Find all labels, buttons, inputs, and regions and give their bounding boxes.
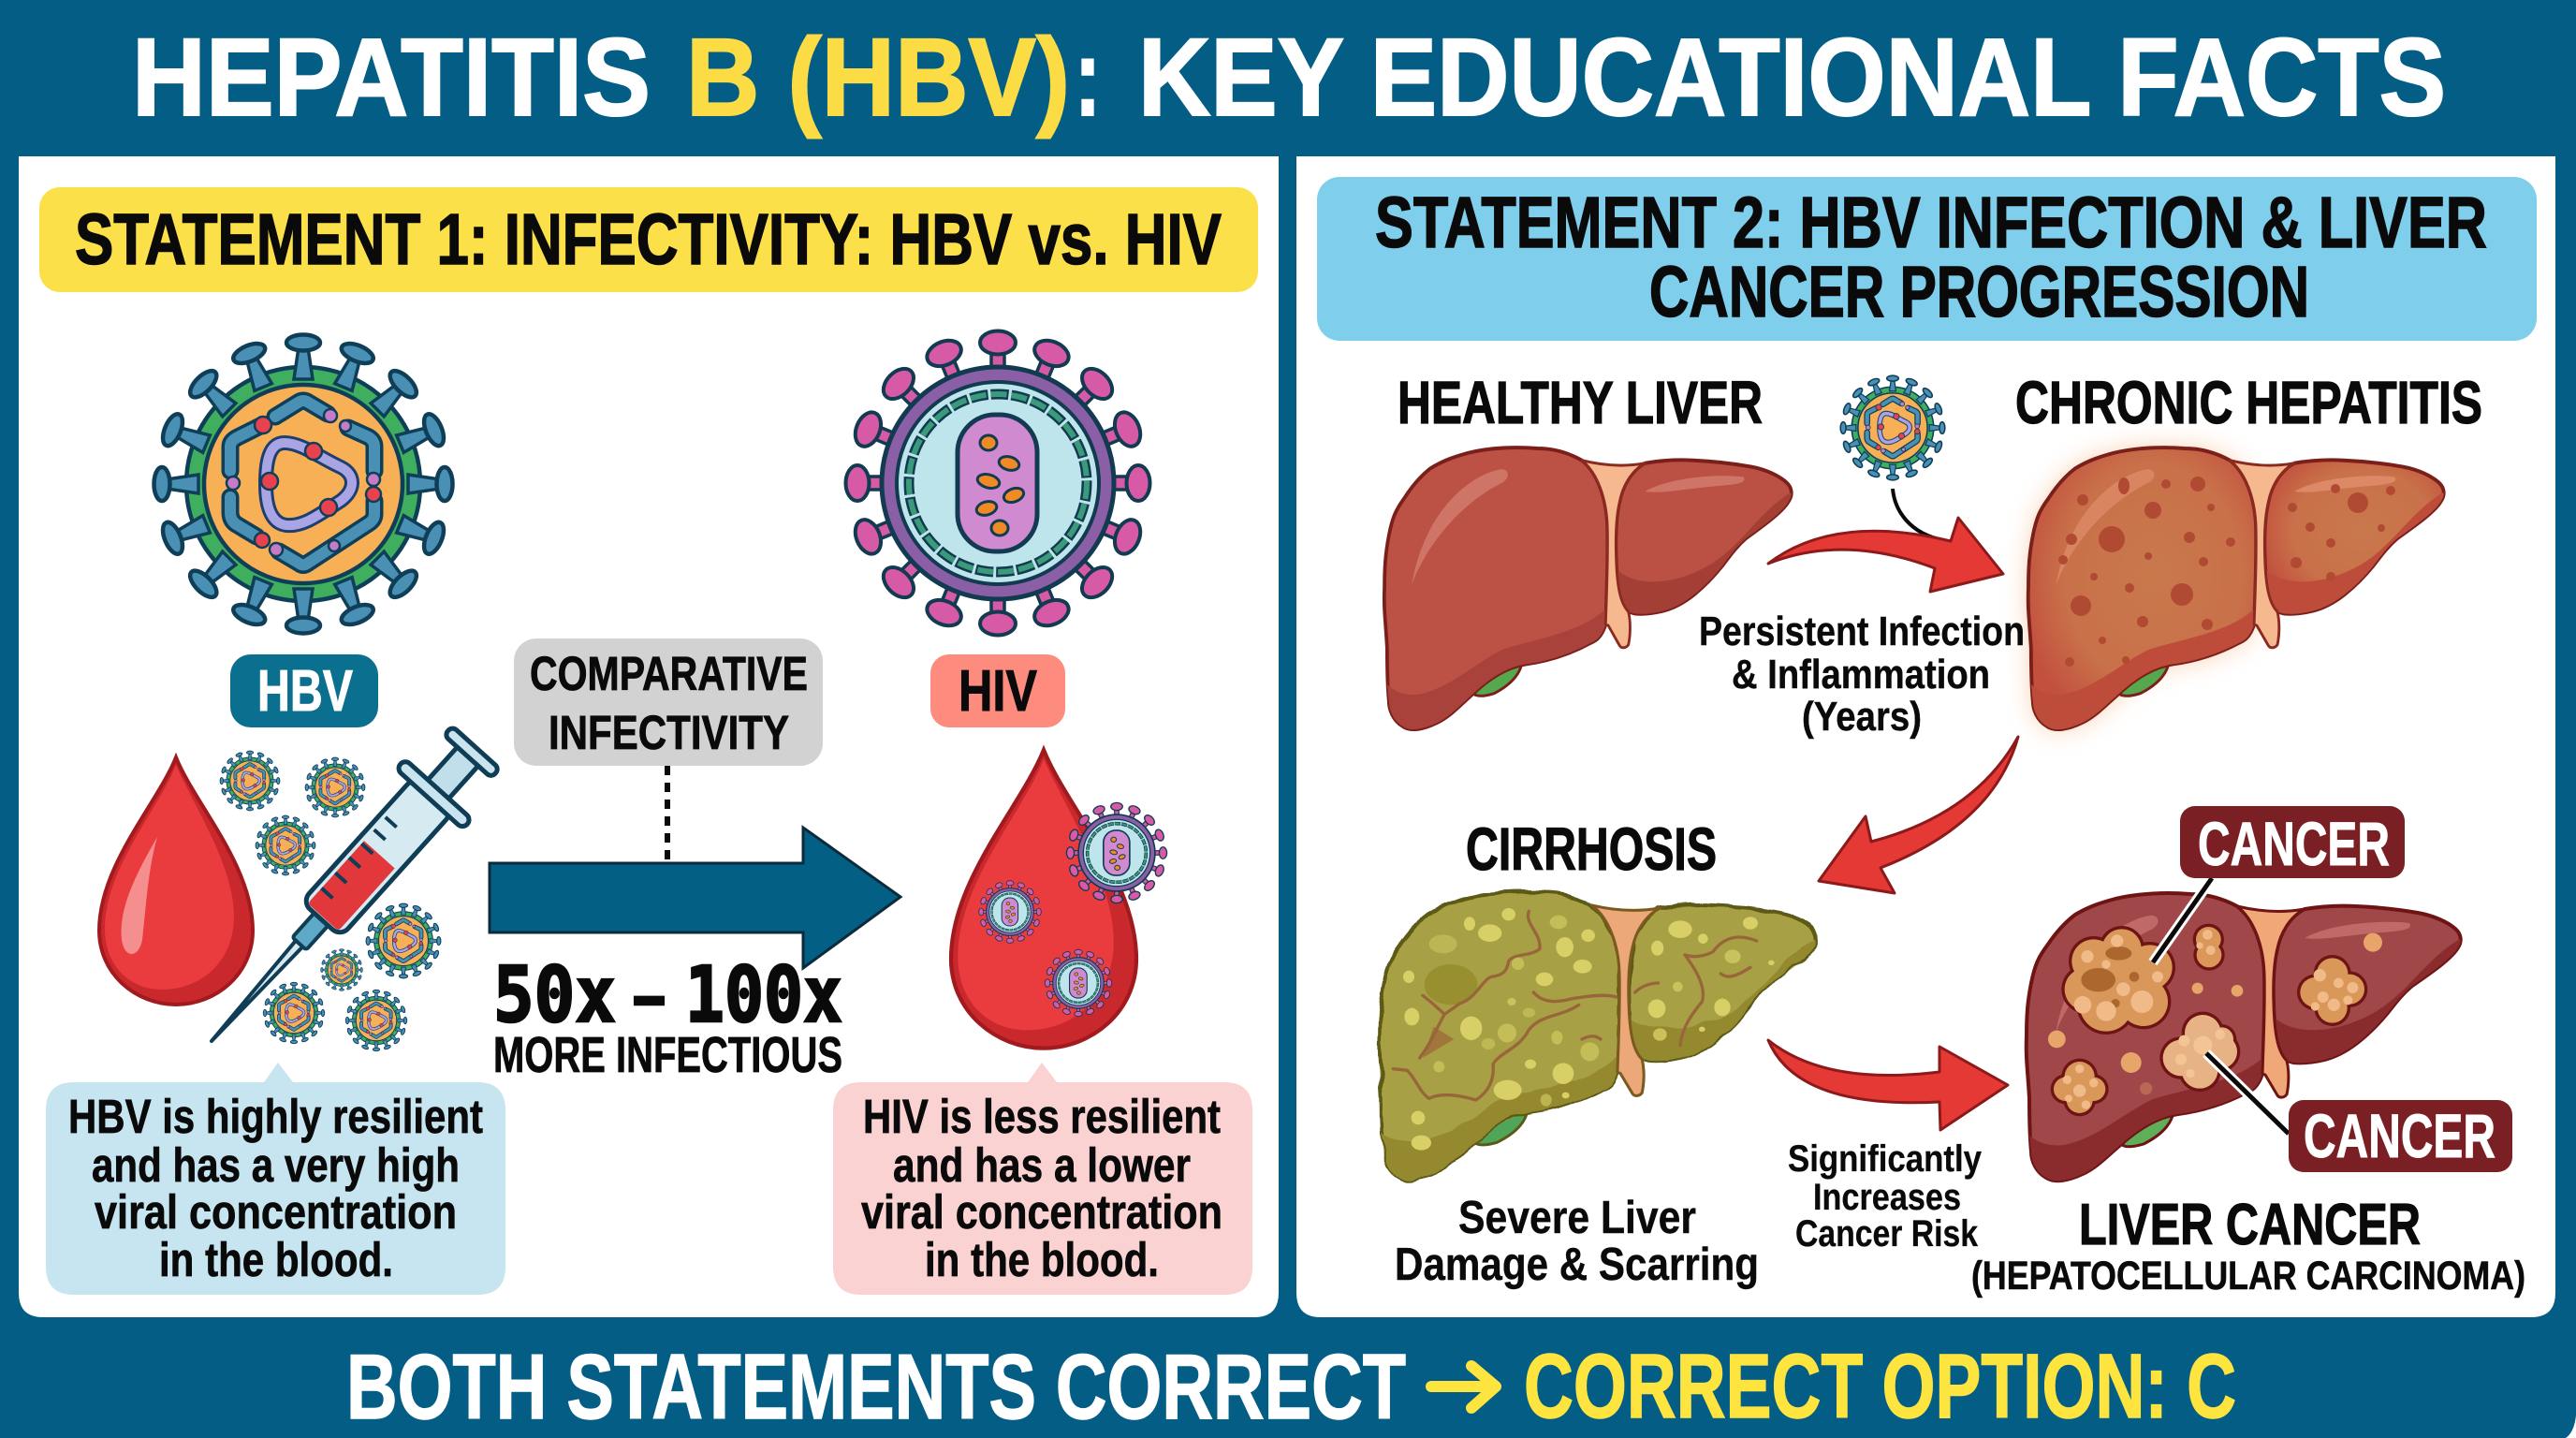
text: persistent infection: (Years) <box>1802 694 1922 740</box>
icon: small HBV particles <box>220 751 441 1051</box>
title: HEPATITIS <box>132 16 651 139</box>
arrow: healthy to chronic <box>1768 489 2003 592</box>
text: severe liver damage <box>1395 1193 1759 1290</box>
footer: conclusion: CORRECT OPTION: C <box>1524 1335 2236 1437</box>
illustration: liver with cancer <box>2027 893 2461 1181</box>
text: persistent infection: Persistent Infection <box>1699 609 2025 654</box>
icon: HIV virus <box>846 331 1149 635</box>
stat: 50x to 100x: 50x <box>493 951 616 1040</box>
callout: HBV resilience: in the blood. <box>159 1233 393 1286</box>
callout: HIV resilience: in the blood. <box>925 1233 1159 1286</box>
text: increases cancer risk <box>1788 1138 1983 1255</box>
callout: cancer label bottom <box>2206 1053 2512 1172</box>
arrow: comparison HBV to HIV <box>490 828 900 968</box>
callout: cancer label top: CANCER <box>2198 809 2390 878</box>
text: more infectious: MORE INFECTIOUS <box>493 1027 842 1083</box>
stat: 50x to 100x: 100x <box>685 951 842 1040</box>
stat: 50x to 100x: – <box>633 953 666 1038</box>
arrow: footer <box>1431 1366 1496 1408</box>
callout: HIV resilience <box>833 1063 1252 1295</box>
footer: conclusion: BOTH STATEMENTS CORRECT <box>346 1335 1406 1438</box>
callout: HIV resilience: and has a lower <box>893 1138 1191 1192</box>
label: HIV <box>930 654 1065 727</box>
illustration: healthy liver <box>1384 448 1792 729</box>
label: comparative infectivity <box>514 638 823 766</box>
illustration: chronic hepatitis liver <box>2028 448 2444 729</box>
label: HIV: HIV <box>959 659 1037 724</box>
text: severe liver damage: Severe Liver <box>1458 1193 1696 1243</box>
callout: HBV resilience: and has a very high <box>92 1138 460 1192</box>
icon: small HIV particles <box>979 802 1167 1017</box>
icon: syringe <box>178 717 509 1071</box>
heading: statement 2: CANCER PROGRESSION <box>1649 252 2309 332</box>
text: persistent infection <box>1699 609 2025 740</box>
heading: statement 1 <box>39 187 1258 292</box>
label: liver cancer: LIVER CANCER <box>2079 1193 2421 1257</box>
icon: small HBV virus <box>1840 375 1945 480</box>
callout: HBV resilience <box>46 1063 505 1295</box>
illustration: cirrhotic liver <box>1379 892 1818 1179</box>
stat: 50x to 100x <box>493 951 842 1040</box>
callout: cancer label top <box>2153 806 2405 962</box>
panel: statement 1 infectivity <box>19 156 1279 1317</box>
text: increases cancer risk: Cancer Risk <box>1795 1213 1979 1255</box>
text: increases cancer risk: Significantly <box>1788 1138 1983 1180</box>
text: persistent infection: & Inflammation <box>1732 652 1990 697</box>
label: cirrhosis: CIRRHOSIS <box>1466 815 1717 883</box>
label: healthy liver: HEALTHY LIVER <box>1398 369 1763 436</box>
icon: blood drop HIV <box>951 750 1136 1049</box>
title: B (HBV) <box>686 16 1070 139</box>
arrow: cirrhosis to cancer <box>1768 1040 2008 1130</box>
label: comparative infectivity: COMPARATIVE <box>530 647 808 700</box>
heading: statement 2 <box>1317 177 2537 341</box>
title: : <box>1075 16 1101 139</box>
text: severe liver damage: Damage & Scarring <box>1395 1240 1759 1290</box>
title <box>132 16 2446 139</box>
panel: statement 2 progression <box>1296 156 2555 1317</box>
callout: cancer label bottom: CANCER <box>2304 1101 2496 1170</box>
callout: HIV resilience: viral concentration <box>861 1185 1222 1239</box>
arrow: chronic to cirrhosis <box>1819 737 2018 893</box>
label: comparative infectivity: INFECTIVITY <box>549 706 789 759</box>
icon: HBV virus <box>154 335 453 633</box>
icon: blood drop HBV <box>99 757 253 1005</box>
callout: HBV resilience: viral concentration <box>95 1185 457 1239</box>
label: HBV: HBV <box>257 659 353 724</box>
callout: HIV resilience: HIV is less resilient <box>863 1090 1221 1143</box>
callout: HBV resilience: HBV is highly resilient <box>68 1090 483 1143</box>
heading: statement 1: STATEMENT 1: INFECTIVITY: HBV vs. HIV <box>75 199 1222 280</box>
text: increases cancer risk: Increases <box>1813 1177 1961 1218</box>
title: KEY EDUCATIONAL FACTS <box>1138 16 2446 139</box>
